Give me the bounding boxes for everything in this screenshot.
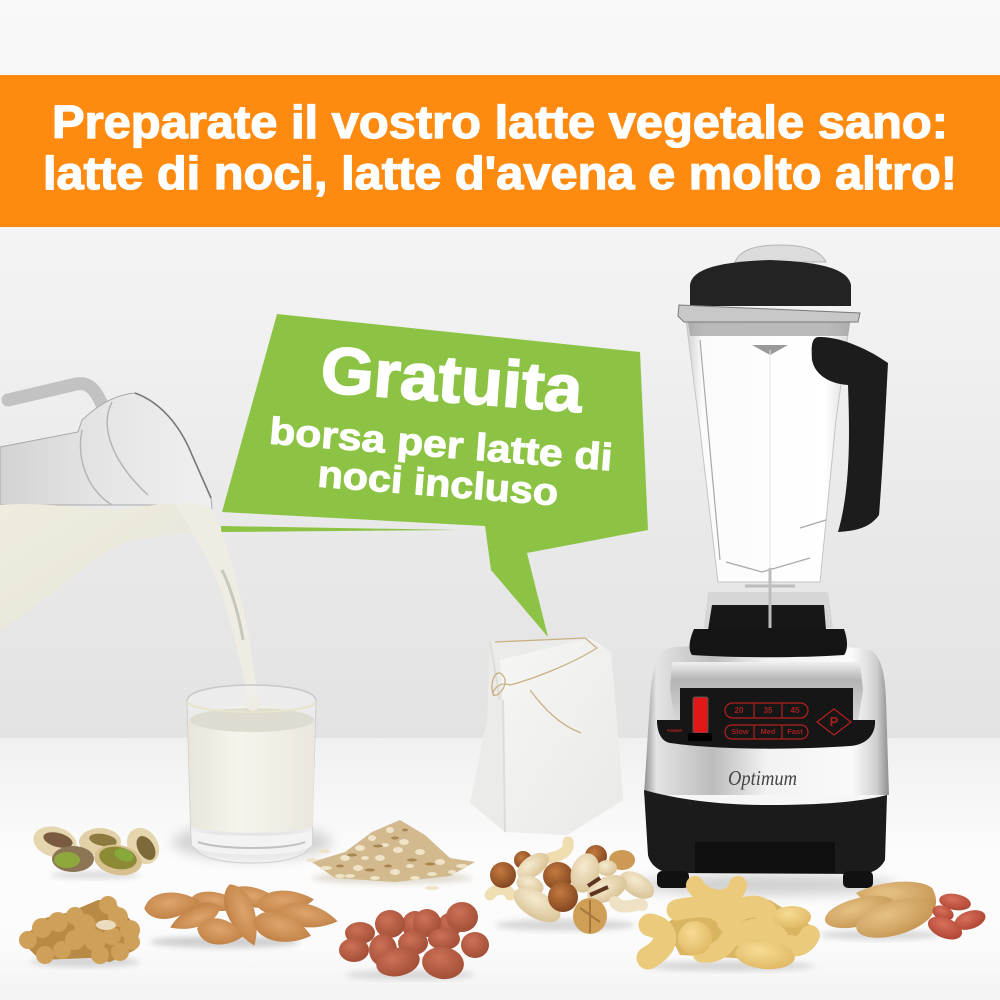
- peanuts: [820, 882, 988, 945]
- nut milk bag: [470, 638, 623, 835]
- title banner: Preparate il vostro latte vegetale sano:: [52, 96, 948, 148]
- blender: 20: [735, 706, 744, 715]
- title banner: [0, 75, 1000, 227]
- callout: free nut milk bag: noci incluso: [316, 454, 560, 514]
- collar: [704, 592, 833, 628]
- blender: 45: [791, 706, 800, 715]
- blender: P: [830, 714, 839, 729]
- blender: POWER: [667, 728, 682, 733]
- pitcher glass: [0, 393, 212, 510]
- pitcher pouring milk: [0, 384, 257, 706]
- hazelnuts: [339, 902, 489, 982]
- mixed nuts: [490, 842, 659, 934]
- almonds: [142, 879, 340, 951]
- blender: [636, 245, 896, 895]
- power switch: [693, 697, 708, 733]
- blender: Med: [760, 727, 776, 736]
- cashews: [645, 885, 815, 972]
- control panel: [657, 688, 875, 749]
- glass of milk: [172, 685, 332, 863]
- milk in pitcher: [0, 504, 205, 631]
- title banner: latte di noci, latte d'avena e molto altro!: [43, 147, 957, 199]
- callout: free nut milk bag: borsa per latte di: [268, 411, 614, 479]
- rolled oats: [306, 820, 475, 890]
- blender: Fast: [787, 727, 803, 736]
- rim: [678, 305, 860, 322]
- blender: 35: [764, 706, 773, 715]
- silver base: [644, 645, 889, 795]
- speed buttons: [725, 703, 851, 739]
- black lower housing: [644, 790, 887, 874]
- black blade pad: [690, 629, 847, 657]
- callout: free nut milk bag: [221, 314, 648, 637]
- drawstring: [492, 638, 597, 733]
- pitcher handle: [8, 384, 105, 412]
- walnuts: [19, 896, 140, 967]
- blender: Slow: [731, 727, 749, 736]
- feet: [657, 871, 689, 888]
- handle: [812, 337, 888, 532]
- lid cap: [735, 245, 826, 262]
- jar: [686, 320, 850, 582]
- callout: free nut milk bag: Gratuita: [318, 332, 587, 426]
- pistachios: [30, 822, 165, 879]
- brand name: Optimum: [728, 766, 797, 790]
- milk stream: [175, 503, 257, 706]
- lid: [690, 260, 851, 306]
